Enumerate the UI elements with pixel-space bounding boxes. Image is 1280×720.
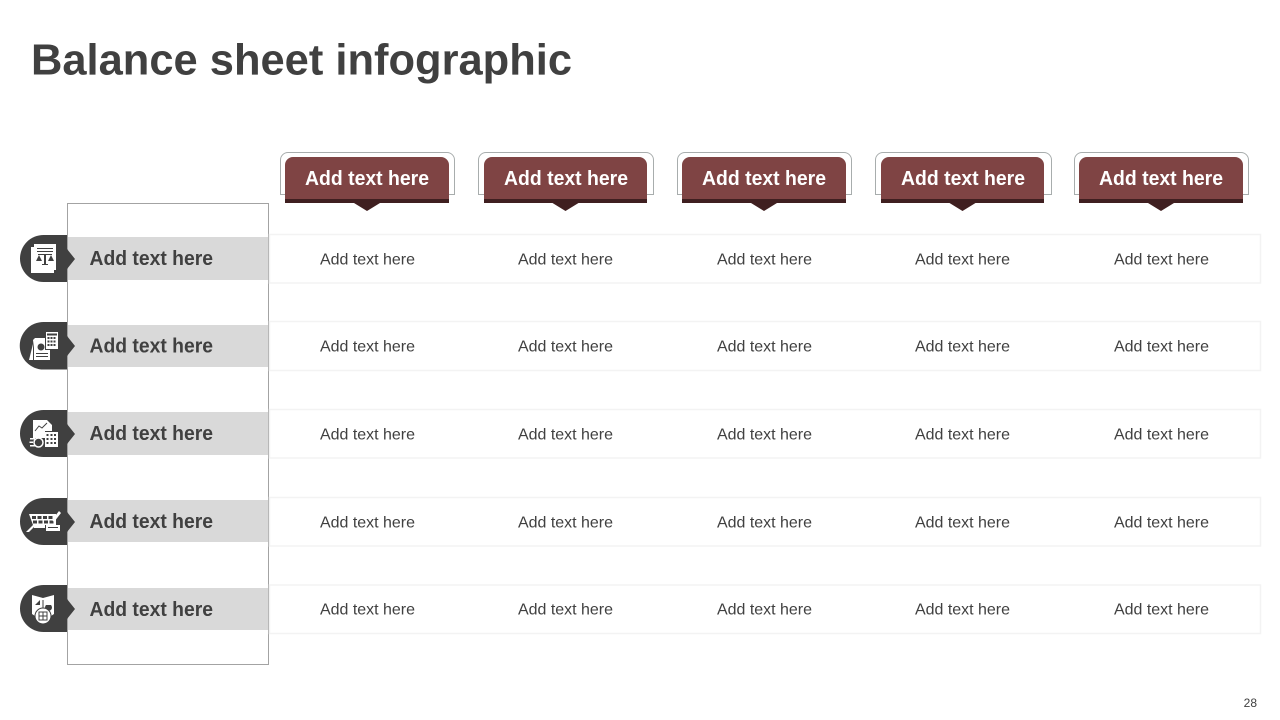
- column header 1: [280, 152, 454, 211]
- column header 5: [1074, 152, 1248, 211]
- row 3 cell texts: Add text here: [320, 426, 415, 444]
- row 2 cell texts: Add text here: [915, 338, 1010, 356]
- row 1 cell texts: Add text here: [518, 252, 613, 268]
- row 5 label bar: [68, 588, 268, 630]
- icon: calculator and bills: [29, 332, 58, 360]
- row 5 cell texts: [320, 602, 1209, 618]
- row 4 cell texts: Add text here: [717, 514, 812, 532]
- row 5 cell texts: Add text here: [717, 602, 812, 618]
- row 1 cell texts: Add text here: [915, 252, 1010, 268]
- row 2 label bar: [68, 325, 268, 367]
- row 1: [20, 234, 1260, 283]
- row 2 label: Add text here: [90, 336, 213, 358]
- row 4 cell texts: Add text here: [320, 514, 415, 532]
- row 2 cells background: [270, 322, 1260, 370]
- row 4 label bar: [68, 500, 268, 542]
- column header 3: Add text here: [702, 168, 826, 190]
- row 1 cell texts: [320, 252, 1209, 268]
- row 3 cell texts: Add text here: [915, 426, 1010, 444]
- title: Balance sheet infographic: [31, 36, 572, 84]
- left panel outline: [68, 204, 268, 664]
- row 5 cell texts: Add text here: [1114, 602, 1209, 618]
- row 1 label bar: [68, 237, 268, 280]
- row 4 label: Add text here: [90, 511, 213, 533]
- icon: scales document: [31, 244, 56, 273]
- row 1 cells background: [270, 234, 1260, 283]
- row 3 cell texts: Add text here: [1114, 426, 1209, 444]
- icon: chart document and calculator: [30, 420, 58, 447]
- row 2 cell texts: Add text here: [717, 338, 812, 356]
- row 4 tab: [20, 498, 75, 545]
- icon: open book and calculator: [32, 595, 54, 624]
- row 3 cell texts: Add text here: [518, 426, 613, 444]
- row 1 cell texts: Add text here: [1114, 252, 1209, 268]
- row 5 cell texts: Add text here: [320, 602, 415, 618]
- row 5 cells background: [270, 585, 1260, 634]
- row 3 cell texts: [320, 426, 1209, 444]
- column header 2: [478, 152, 654, 211]
- row 2 cell texts: Add text here: [518, 338, 613, 356]
- row 5 label: Add text here: [90, 599, 213, 621]
- row 4 cell texts: Add text here: [1114, 514, 1209, 532]
- page number: 28: [1244, 696, 1257, 710]
- row 2 cell texts: Add text here: [1114, 338, 1209, 356]
- row 5 cell texts: Add text here: [915, 602, 1010, 618]
- column header 3: [678, 152, 852, 211]
- row 4: [20, 498, 1260, 546]
- icon: keyboard ledger and pen: [26, 511, 61, 532]
- row 4 cells background: [270, 498, 1260, 546]
- column header 2: Add text here: [504, 168, 628, 190]
- row 4 cell texts: [320, 514, 1209, 532]
- row 4 cell texts: Add text here: [518, 514, 613, 532]
- row 3 tab: [20, 410, 75, 457]
- column header 5: Add text here: [1099, 168, 1223, 190]
- column header 4: Add text here: [901, 168, 1025, 190]
- row 2 tab: [20, 322, 75, 370]
- row 1 tab: [20, 235, 75, 282]
- row 4 cell texts: Add text here: [915, 514, 1010, 532]
- row 1 label: Add text here: [90, 248, 213, 270]
- row 1 cell texts: Add text here: [320, 252, 415, 268]
- row 3: [20, 410, 1260, 458]
- row 1 cell texts: Add text here: [717, 252, 812, 268]
- row 2: [20, 322, 1260, 370]
- column header 1: Add text here: [305, 168, 429, 190]
- row 5 cell texts: Add text here: [518, 602, 613, 618]
- row 5 tab: [20, 585, 75, 632]
- row 5: [20, 585, 1260, 634]
- row 3 label: Add text here: [90, 423, 213, 445]
- row 3 cells background: [270, 410, 1260, 458]
- row 3 cell texts: Add text here: [717, 426, 812, 444]
- row 2 cell texts: [320, 338, 1209, 356]
- row 2 cell texts: Add text here: [320, 338, 415, 356]
- row 3 label bar: [68, 412, 268, 455]
- column header 4: [876, 152, 1052, 211]
